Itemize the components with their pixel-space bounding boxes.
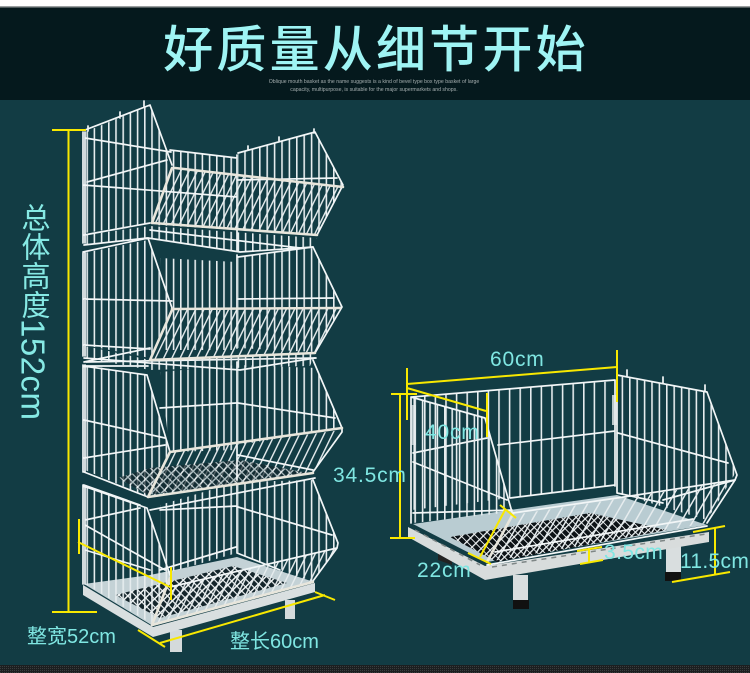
tower of four stacked baskets [83,101,343,652]
dimension: width 52cm lines [78,519,171,600]
label: length 60cm: 整长60cm [230,630,319,653]
basket 1 (top) [83,101,343,252]
subtitle: capacity, multipurpose, is suitable for the major supermarkets and shops. [290,87,458,93]
basket left side panel [411,397,512,523]
subtitle [269,79,479,93]
tower legs [170,600,295,652]
header band [0,6,750,100]
tower base tray [83,557,315,637]
dimension: length 60cm lines [138,592,335,647]
top white strip [0,0,750,6]
dimension: 40cm lines [407,388,487,437]
label: 34.5cm: 34.5cm [333,464,407,487]
basket 2 [83,238,342,370]
label: 40cm: 40cm [425,421,480,444]
title: 好质量从细节开始 [163,22,589,78]
dimension: 34.5cm lines [390,394,417,538]
label: 3.5cm: 3.5cm [604,541,663,564]
basket 3 [83,358,342,510]
dimension: 60cm lines [407,350,617,420]
basket right side panel [612,370,737,523]
bottom dotted band [0,665,750,673]
subtitle: Oblique mouth basket as the name suggests is a kind of bevel type box type basket of large [269,79,479,85]
label: width 52cm: 整宽52cm [27,625,116,648]
label: 11.5cm: 11.5cm [680,550,749,573]
label: 22cm: 22cm [417,559,472,582]
basket front lower panel [487,480,735,565]
dimension: 22cm lines [468,505,516,564]
label: total height: 总体高度 152cm [14,203,52,421]
dimension: 11.5cm lines [672,526,730,582]
single basket [408,370,737,609]
basket 4 (bottom) [83,480,338,625]
basket legs [438,545,681,609]
dimension: total height line [52,130,97,612]
label: 60cm: 60cm [490,348,545,371]
basket base tray [408,495,709,580]
dimension: 3.5cm lines [577,547,603,564]
basket back panel [412,380,615,510]
